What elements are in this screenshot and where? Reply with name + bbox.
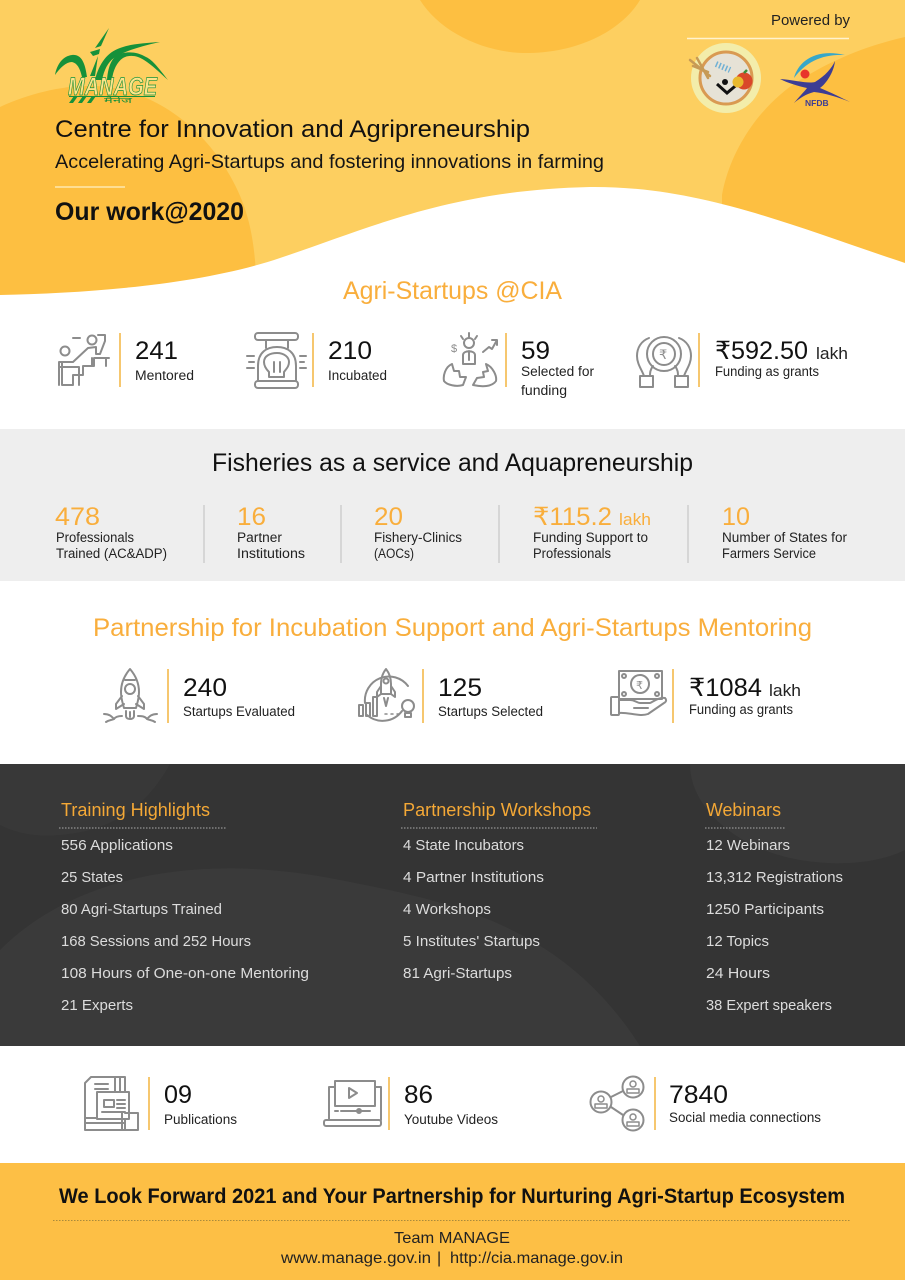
- stat: mentored: [59, 333, 194, 387]
- icon: laptop with video: [324, 1081, 381, 1126]
- stat: funding as grants: [611, 669, 801, 723]
- list: training highlights: 556 Applications: [61, 837, 173, 854]
- icon: hands holding rupee coin: [637, 337, 691, 387]
- stat: states: [722, 503, 847, 561]
- stat: selected for funding: Selected for: [521, 364, 595, 379]
- MANAGE logo: मैनेज: [104, 95, 134, 105]
- list: partnership workshops: [401, 800, 597, 982]
- stat: professionals trained: 478: [55, 503, 100, 531]
- list: partnership workshops: 5 Institutes' Startups: [403, 933, 540, 950]
- list: training highlights: 168 Sessions and 252 Hours: [61, 933, 251, 950]
- stat: fishery clinics: (AOCs): [374, 546, 414, 561]
- stat: professionals trained: Professionals: [56, 530, 134, 545]
- website links: http://cia.manage.gov.in: [450, 1250, 623, 1267]
- logo: National Agriculture Development Programme: [690, 43, 761, 113]
- list: webinars: 13,312 Registrations: [706, 869, 843, 886]
- stat: startups selected: 125: [438, 674, 482, 702]
- logo: NFDB: [780, 53, 850, 108]
- stat: publications: Publications: [164, 1112, 237, 1127]
- list: partnership workshops: Partnership Workshops: [403, 800, 591, 820]
- MANAGE logo: MANAGE: [68, 73, 158, 101]
- list: webinars: 1250 Participants: [706, 901, 824, 918]
- stat: publications: 09: [164, 1081, 192, 1109]
- heading: fisheries: Fisheries as a service and Aquapreneurship: [212, 449, 693, 477]
- stat: social media connections: [590, 1076, 821, 1130]
- stat: startups evaluated: Startups Evaluated: [183, 704, 295, 719]
- icon: newspapers: [85, 1077, 138, 1130]
- list: training highlights: 21 Experts: [61, 997, 133, 1014]
- icon: hands holding rupee coin: ₹: [659, 347, 667, 362]
- stat: partner institutions: Partner: [237, 530, 283, 545]
- list: webinars: 12 Webinars: [706, 837, 790, 854]
- icon: scale with bulb: [247, 333, 306, 388]
- list: training highlights: 25 States: [61, 869, 123, 886]
- stat: funding support: [533, 503, 651, 561]
- stat: publications: [85, 1077, 237, 1130]
- stat: selected for funding: [444, 333, 595, 398]
- stat: fishery clinics: Fishery-Clinics: [374, 530, 462, 545]
- stat: youtube videos: Youtube Videos: [404, 1112, 498, 1127]
- stat: incubated: Incubated: [328, 368, 387, 383]
- stat: social media connections: 7840: [669, 1081, 728, 1109]
- stat: funding as grants: Funding as grants: [689, 702, 793, 717]
- title: Centre for Innovation and Agripreneurship: [55, 116, 530, 143]
- panel: fisheries: [0, 429, 905, 581]
- icon: hatching egg: [444, 333, 497, 386]
- footer heading: We Look Forward 2021 and Your Partnership for Nurturing Agri-Startup Ecosystem: [59, 1185, 845, 1208]
- stat: funding support: Professionals: [533, 546, 611, 561]
- stat: funding as grants: Funding as grants: [715, 364, 819, 379]
- icon: connected people: [590, 1076, 644, 1130]
- stat: funding as grants: [637, 333, 848, 387]
- stat: funding as grants: lakh: [816, 344, 848, 363]
- website links: www.manage.gov.in: [280, 1250, 431, 1267]
- icon: mentor on stairs: [59, 335, 109, 385]
- MANAGE logo: [55, 28, 168, 105]
- list: partnership workshops: 4 Partner Institutions: [403, 869, 544, 886]
- stat: startups evaluated: [104, 669, 295, 723]
- stat: startups evaluated: 240: [183, 674, 227, 702]
- stat: fishery clinics: 20: [374, 503, 403, 531]
- panel: footer: [0, 1163, 905, 1280]
- stat: funding support: ₹115.2: [533, 503, 612, 531]
- icon: rocket: [104, 669, 157, 722]
- stat: selected for funding: funding: [521, 383, 567, 398]
- stat: youtube videos: [324, 1077, 498, 1130]
- stat: states: 10: [722, 503, 750, 531]
- list: webinars: [705, 800, 843, 1014]
- list: training highlights: [59, 800, 309, 1014]
- list: partnership workshops: 4 Workshops: [403, 901, 491, 918]
- stat: funding as grants: ₹592.50: [715, 337, 808, 365]
- list: training highlights: Training Highlights: [61, 800, 210, 820]
- icon: hand with banknote: ₹: [636, 680, 643, 692]
- stat: professionals trained: Trained (AC&ADP): [56, 546, 167, 561]
- stat: states: Number of States for: [722, 530, 847, 545]
- list: training highlights: 108 Hours of One-on-one Mentoring: [61, 965, 309, 982]
- stat: partner institutions: 16: [237, 503, 266, 531]
- stat: partner institutions: Institutions: [237, 546, 305, 561]
- list: partnership workshops: 81 Agri-Startups: [403, 965, 512, 982]
- stat: states: Farmers Service: [722, 546, 816, 561]
- team name: Team MANAGE: [394, 1230, 510, 1247]
- stat: incubated: 210: [328, 337, 372, 365]
- stat: professionals trained: [55, 503, 167, 561]
- icon: hand with banknote: [611, 671, 666, 715]
- stat: funding as grants: lakh: [769, 681, 801, 700]
- website links: [280, 1250, 623, 1267]
- stat: incubated: [247, 333, 387, 388]
- logo: NFDB: NFDB: [805, 98, 829, 108]
- website links: |: [437, 1250, 441, 1267]
- subtitle: Accelerating Agri-Startups and fostering innovations in farming: [55, 151, 604, 173]
- stat: startups selected: Startups Selected: [438, 704, 543, 719]
- stat: youtube videos: 86: [404, 1081, 433, 1109]
- heading: Agri-Startups @CIA: Agri-Startups @CIA: [343, 277, 562, 305]
- stat: funding support: lakh: [619, 510, 651, 529]
- stat: mentored: 241: [135, 337, 178, 365]
- stat: fishery clinics: [374, 503, 462, 561]
- stat: mentored: Mentored: [135, 368, 194, 383]
- header background: [0, 0, 905, 300]
- panel: dark highlights: [0, 764, 905, 1046]
- icon: rocket with chart and bulb: [359, 669, 414, 721]
- stat: funding support: Funding Support to: [533, 530, 648, 545]
- list: webinars: 24 Hours: [706, 965, 770, 982]
- heading: partnership: Partnership for Incubation Support and Agri-Startups Mentoring: [93, 614, 812, 642]
- stat: funding as grants: ₹1084: [689, 674, 762, 702]
- stat: partner institutions: [237, 503, 305, 561]
- list: partnership workshops: 4 State Incubators: [403, 837, 524, 854]
- stat: social media connections: Social media connections: [669, 1110, 821, 1125]
- icon: hatching egg: $: [451, 343, 457, 355]
- heading: Our work@2020: Our work@2020: [55, 198, 244, 226]
- list: webinars: 38 Expert speakers: [706, 997, 832, 1014]
- stat: startups selected: [359, 669, 543, 723]
- list: training highlights: 80 Agri-Startups Trained: [61, 901, 222, 918]
- list: webinars: 12 Topics: [706, 933, 769, 950]
- stat: selected for funding: 59: [521, 337, 550, 365]
- list: webinars: Webinars: [706, 800, 781, 820]
- powered by: Powered by: [771, 12, 850, 29]
